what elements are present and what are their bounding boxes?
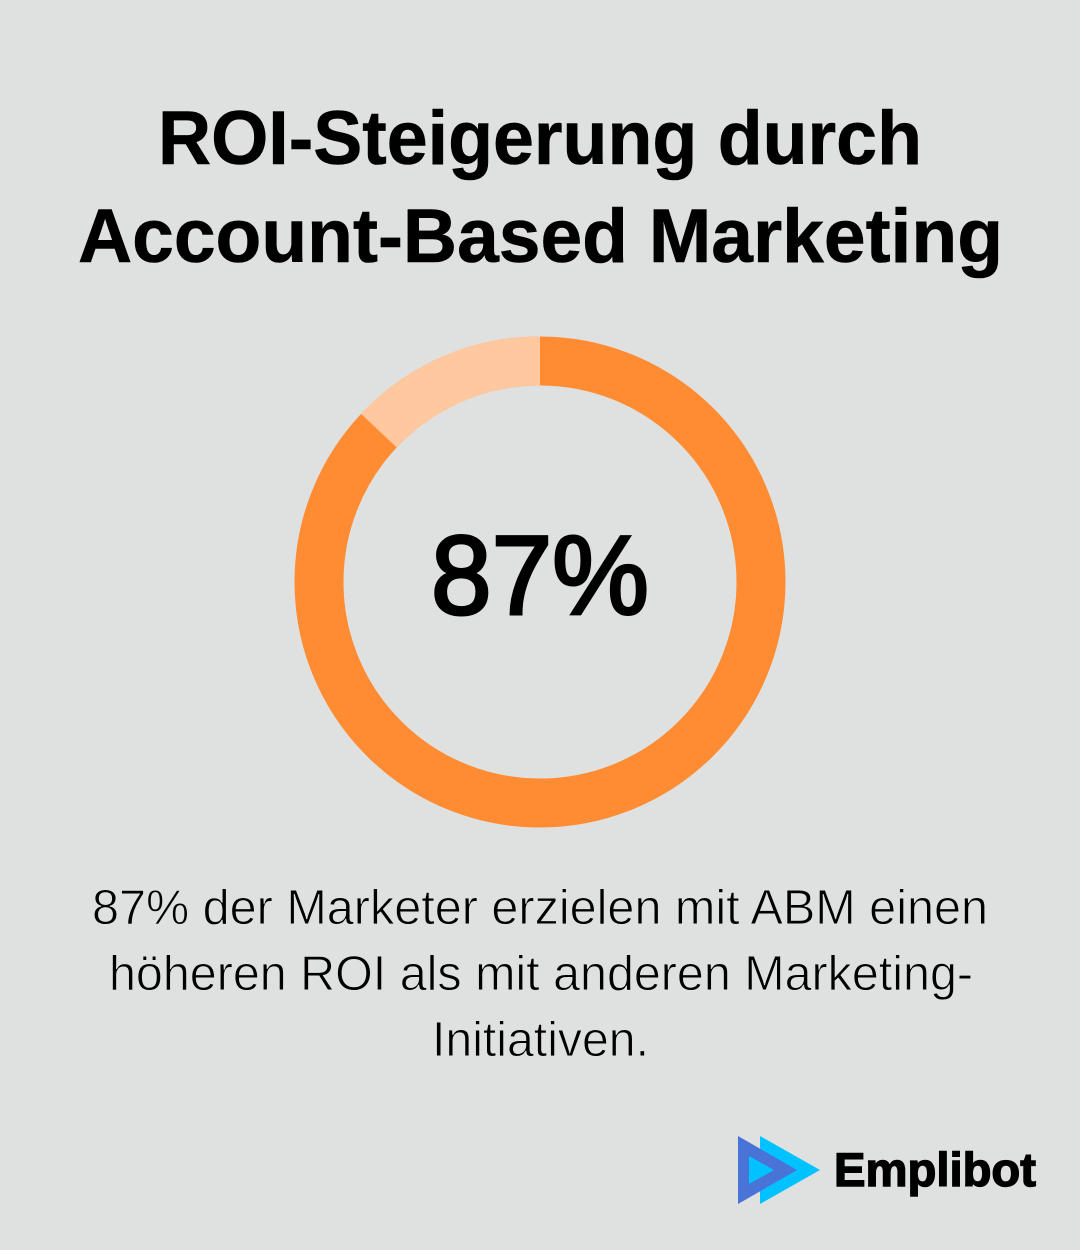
- title: [78, 96, 1003, 279]
- title: ROI-Steigerung durch: [158, 96, 922, 181]
- description text: [92, 881, 988, 1067]
- description text: 87% der Marketer erzielen mit ABM einen: [92, 881, 988, 935]
- title: Account-Based Marketing: [78, 194, 1003, 279]
- logo: Emplibot: [738, 1136, 1036, 1204]
- description text: Initiativen.: [432, 1013, 649, 1067]
- logo wordmark: Emplibot: [834, 1143, 1036, 1196]
- donut centre value: 87%: [431, 513, 649, 638]
- donut chart: 87%: [319, 361, 761, 803]
- description text: höheren ROI als mit anderen Marketing-: [109, 947, 973, 1001]
- icon: play triangles: [738, 1136, 820, 1204]
